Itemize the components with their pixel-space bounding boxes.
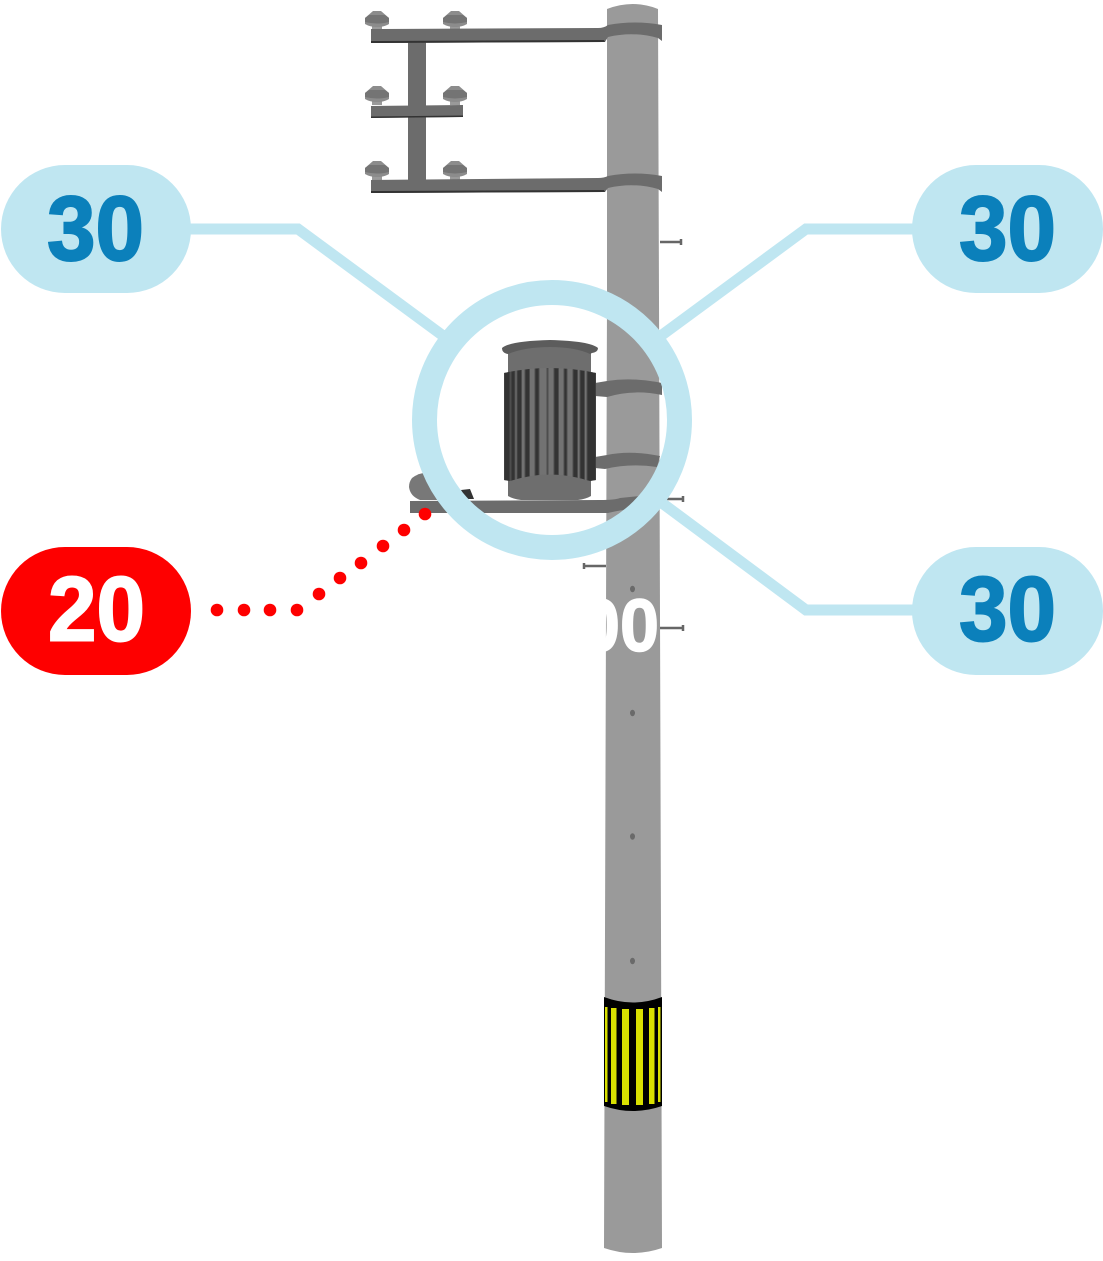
magnifier ring xyxy=(424,292,680,548)
vertical brace xyxy=(408,30,426,190)
badge: red 20: 20 xyxy=(48,558,145,660)
utility pole xyxy=(584,4,683,1253)
badge: red 20 xyxy=(1,547,191,675)
middle arm xyxy=(371,105,463,118)
badge: top right 30: 30 xyxy=(959,178,1056,280)
badge: top right 30 xyxy=(912,165,1103,293)
motor cap xyxy=(502,340,598,354)
reflective band xyxy=(604,997,662,1111)
red dotted leader xyxy=(211,508,431,616)
top arm and clamp xyxy=(371,22,662,43)
badge: top left 30 xyxy=(1,165,191,293)
connector lines xyxy=(185,229,918,610)
lower arm and clamp xyxy=(371,174,662,193)
crossarm assembly xyxy=(365,11,662,193)
pole bolts and holes xyxy=(584,239,683,964)
motor platform xyxy=(409,473,640,513)
number on pole: 00 xyxy=(581,584,659,667)
badge: lower right 30: 30 xyxy=(959,558,1056,660)
insulators xyxy=(365,11,467,180)
motor body xyxy=(508,345,591,378)
badge: top left 30: 30 xyxy=(47,178,144,280)
cooling fins xyxy=(504,360,596,485)
clamps xyxy=(595,379,662,397)
electric motor xyxy=(502,340,662,500)
badge: lower right 30 xyxy=(912,547,1103,675)
